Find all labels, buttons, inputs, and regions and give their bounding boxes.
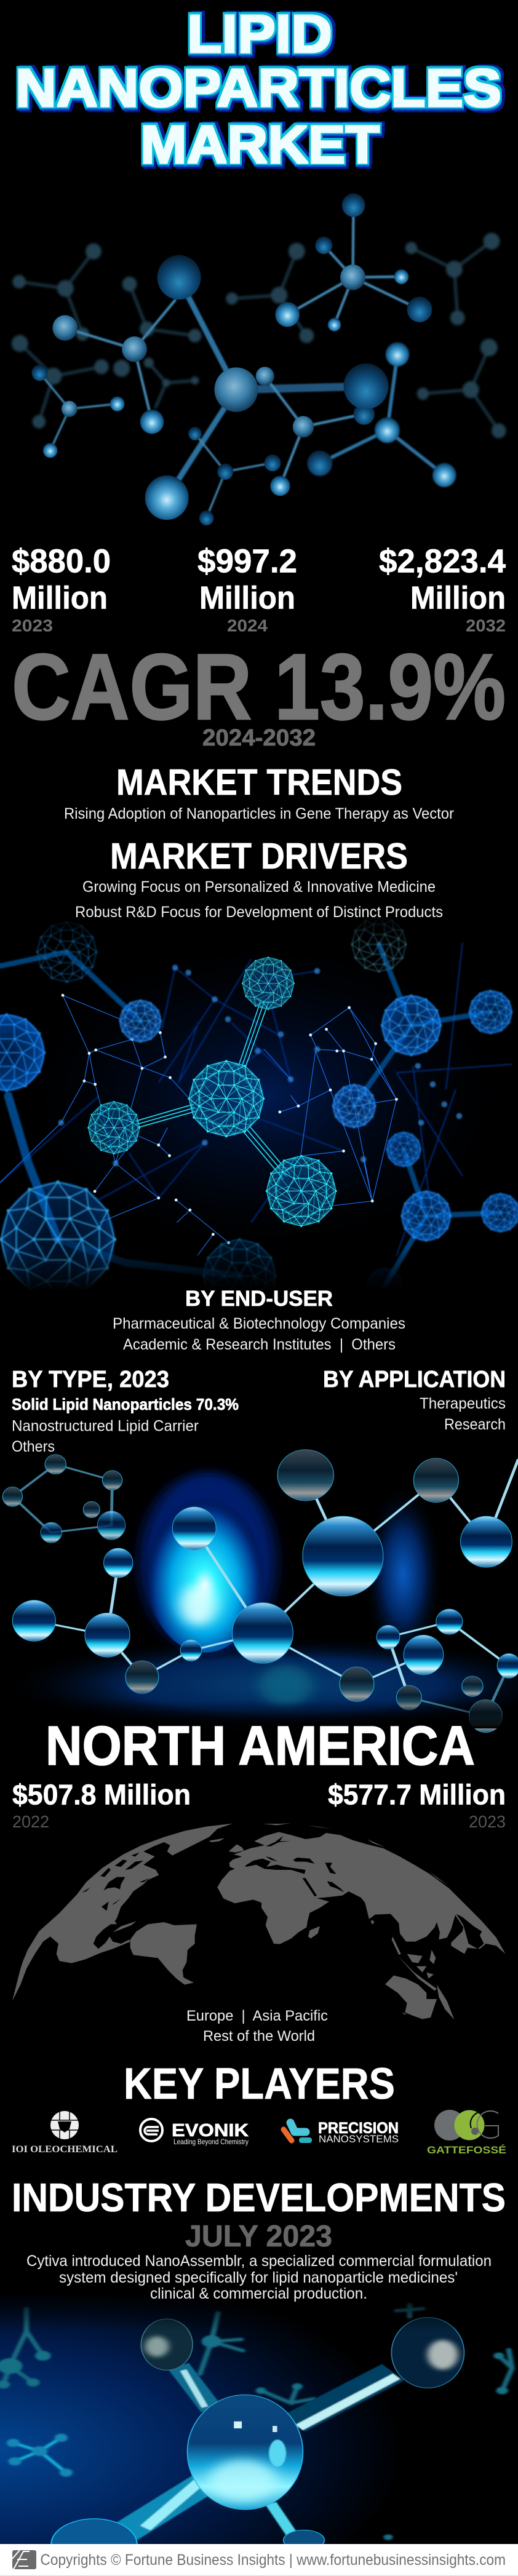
market size: 2024: $997.2 — [197, 543, 297, 579]
connecting tubes — [0, 944, 501, 1286]
market size: 2023: $880.0 — [12, 543, 111, 579]
development description — [26, 2252, 492, 2302]
by end-user segment: Pharmaceutical & Biotechnology Companies — [113, 1315, 405, 1332]
key players heading: KEY PLAYERS — [124, 2060, 395, 2109]
out-of-focus wireframe spheres — [0, 917, 518, 1313]
by application segment: Research — [444, 1416, 506, 1433]
development description: clinical & commercial production. — [150, 2285, 367, 2302]
market size: 2032: 2032 — [466, 616, 506, 635]
market size: 2023 — [12, 543, 111, 635]
logo: Gattefosse: GATTEFOSSÉ — [427, 2144, 506, 2156]
market trends: MARKET TRENDS — [116, 762, 402, 803]
blue backdrop — [0, 2296, 518, 2544]
bonds — [12, 1460, 518, 1716]
logo: Precision Nanosystems — [284, 2120, 399, 2145]
market trends — [64, 762, 454, 822]
background small molecules — [0, 2305, 512, 2540]
logo: IOI Oleochemical — [12, 2111, 118, 2155]
by end-user segment: Academic & Research Institutes | Others — [123, 1336, 396, 1353]
other regions list — [186, 2008, 328, 2045]
development date: JULY 2023 — [185, 2220, 332, 2253]
by application segment — [323, 1367, 506, 1433]
top fade — [0, 2290, 518, 2331]
title — [15, 4, 501, 175]
North America 2022 value: 2022 — [12, 1812, 49, 1831]
logo: Evonik: Leading Beyond Chemistry — [173, 2137, 249, 2146]
market drivers — [75, 836, 443, 921]
market drivers: Growing Focus on Personalized & Innovative Medicine — [82, 878, 436, 896]
logo: Evonik — [140, 2119, 249, 2146]
illustration: glass ball molecules — [0, 1450, 518, 1735]
development description: system designed specifically for lipid nanoparticle medicines' — [59, 2269, 458, 2286]
market size: 2024: Million — [199, 581, 295, 616]
North America 2023 value — [328, 1779, 506, 1831]
illustration: wireframe molecule network — [0, 917, 518, 1313]
logo: Precision Nanosystems: PRECISION — [318, 2120, 399, 2137]
deep navy haze — [7, 929, 518, 1263]
outer glass balls — [51, 2318, 464, 2570]
faded background molecules — [12, 233, 506, 439]
by type segment: Solid Lipid Nanoparticles 70.3% — [12, 1395, 239, 1413]
North America 2022 value: $507.8 Million — [12, 1779, 191, 1811]
market size: 2032 — [379, 543, 506, 635]
logo: Gattefosse — [427, 2110, 506, 2156]
logo: Evonik: EVONIK — [172, 2121, 249, 2141]
dim background network — [0, 943, 512, 1256]
market size: 2024: 2024 — [227, 616, 268, 635]
footer bar — [0, 2544, 518, 2576]
world map globe — [12, 1823, 506, 2019]
North America 2022 value — [12, 1779, 191, 1831]
logo: Precision Nanosystems: NANOSYSTEMS — [319, 2133, 399, 2145]
glass atoms — [2, 1450, 518, 1733]
market drivers: Robust R&D Focus for Development of Distinct Products — [75, 904, 443, 921]
by application segment: BY APPLICATION — [323, 1367, 506, 1393]
title: NANOPARTICLES — [15, 58, 501, 118]
eastern hemisphere — [217, 1823, 506, 2019]
market size: 2024 — [197, 543, 297, 635]
by end-user segment: BY END-USER — [185, 1287, 333, 1311]
by end-user segment — [113, 1287, 405, 1353]
region heading: North America: NORTH AMERICA — [46, 1715, 475, 1777]
North America 2023 value: 2023 — [469, 1812, 506, 1831]
market size: 2032: $2,823.4 — [379, 543, 506, 579]
fine connection lines and nodes — [0, 968, 459, 1255]
market size: 2023: 2023 — [12, 616, 53, 635]
by type segment: Nanostructured Lipid Carrier — [12, 1417, 199, 1434]
atoms — [32, 193, 456, 525]
market size: 2032: Million — [410, 581, 506, 616]
western hemisphere — [12, 1824, 244, 2001]
North America 2023 value: $577.7 Million — [328, 1779, 506, 1811]
market drivers: MARKET DRIVERS — [110, 836, 408, 877]
bonds — [39, 205, 444, 518]
market trends: Rising Adoption of Nanoparticles in Gene Therapy as Vector — [64, 805, 454, 822]
bottom fade of glass molecules — [0, 1701, 518, 1728]
icon: Fortune Business Insights logo — [12, 2550, 36, 2569]
by type segment: BY TYPE, 2023 — [12, 1367, 169, 1393]
by type segment: Others — [12, 1438, 55, 1455]
logo: IOI Oleochemical: IOI OLEOCHEMICAL — [12, 2144, 118, 2155]
development description: Cytiva introduced NanoAssemblr, a specialized commercial formulation — [26, 2252, 492, 2270]
other regions list: Rest of the World — [203, 2028, 315, 2045]
glow background — [0, 1472, 518, 1735]
title: LIPID — [187, 4, 332, 64]
by application segment: Therapeutics — [420, 1395, 506, 1412]
illustration: blue ball-and-stick molecules — [12, 193, 506, 525]
illustration: glowing molecule — [0, 2290, 518, 2570]
title: MARKET — [140, 115, 380, 175]
other regions list: Europe | Asia Pacific — [186, 2008, 328, 2024]
market size: 2023: Million — [12, 581, 108, 616]
bright central molecule — [84, 953, 343, 1233]
CAGR callout: 2024-2032 — [202, 725, 316, 751]
tubes — [126, 2366, 396, 2542]
central glass ball — [187, 2395, 303, 2510]
by type segment — [12, 1367, 239, 1455]
image fades — [0, 913, 518, 1437]
